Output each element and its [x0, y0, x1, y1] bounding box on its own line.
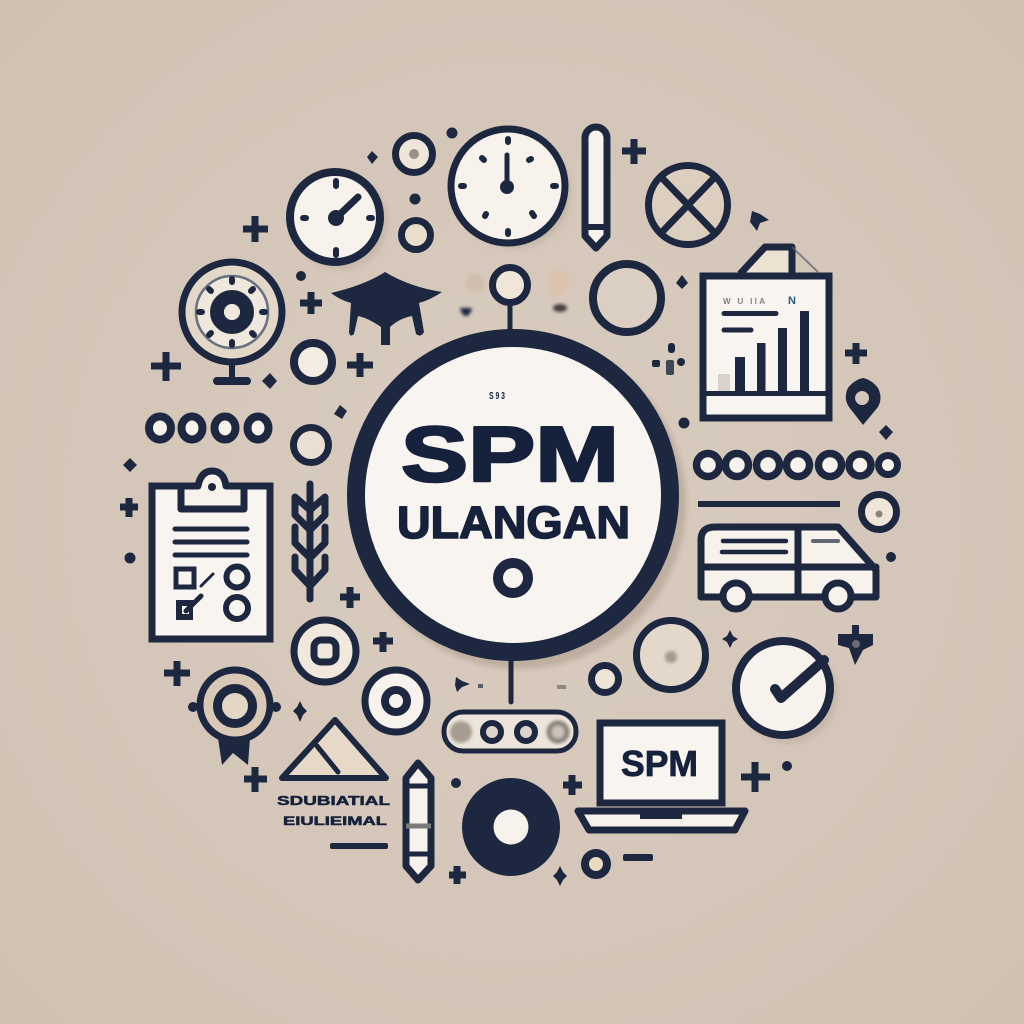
- icon: pill with rings: [444, 712, 576, 751]
- ring: [294, 428, 328, 462]
- icon: wheat: [295, 484, 325, 599]
- checklist lines: [175, 529, 247, 555]
- icon: triangle: [282, 720, 386, 778]
- icon: pencil top: [585, 127, 607, 248]
- icon: dot cluster: [652, 343, 685, 375]
- small ring: [402, 220, 430, 250]
- caption below triangle: SDUBIATIAL: [277, 793, 390, 808]
- ring: [592, 666, 618, 692]
- plus signs: [120, 139, 867, 884]
- icon: check circle: [736, 641, 838, 744]
- icon: concentric ring with rounded square: [294, 620, 356, 682]
- checkbox options: [176, 566, 248, 620]
- icon: report document with bar chart: [703, 247, 829, 418]
- icon: wall clock: [451, 129, 571, 249]
- icon: award badge: [188, 670, 281, 765]
- divider line: [698, 501, 840, 507]
- icon: small ring with dash: [585, 853, 653, 875]
- small ring with grey centre: [396, 136, 432, 172]
- icon: crossed circle: [648, 166, 728, 244]
- small badge caption: S 9 3: [489, 391, 505, 402]
- caption below triangle: [277, 793, 390, 828]
- faint vertical line: [626, 175, 630, 238]
- icon: concentric ring: [365, 670, 427, 732]
- bar chart: [703, 311, 829, 396]
- icon: spiky marker: [838, 625, 873, 665]
- laptop screen label: SPM: [621, 743, 698, 784]
- document letter: N: [788, 295, 796, 307]
- icon: graduation cap: [331, 272, 442, 345]
- title: SPM: SPM: [401, 410, 619, 498]
- large ring: [593, 264, 661, 332]
- icon: gear target on stand: [182, 262, 282, 381]
- ring: [636, 620, 706, 690]
- row of seven rings: [696, 454, 898, 476]
- ring on stem: [492, 268, 528, 331]
- icon: solid disk: [478, 794, 544, 860]
- icon: van: [701, 527, 876, 609]
- ring: [294, 343, 332, 381]
- subtitle: ULANGAN: ULANGAN: [397, 497, 630, 548]
- decorative dots, diamonds: [123, 128, 896, 886]
- ring with dot: [862, 494, 896, 530]
- row of four rings: [149, 416, 268, 440]
- icon: pencil bottom: [406, 763, 431, 880]
- icon: laptop: [578, 723, 745, 830]
- central badge: [354, 337, 686, 669]
- caption line two: EIULIEIMAL: [283, 814, 387, 828]
- dash line: [330, 843, 388, 849]
- document heading: W U IIA: [723, 297, 765, 306]
- icon: small clock: [290, 172, 388, 270]
- icon: map pin: [846, 378, 880, 425]
- stem below badge: [508, 660, 514, 702]
- icon: clipboard checklist: [152, 471, 270, 639]
- badge ring icon: [498, 563, 528, 593]
- small marks: [455, 677, 566, 692]
- faint blobs: [460, 269, 569, 316]
